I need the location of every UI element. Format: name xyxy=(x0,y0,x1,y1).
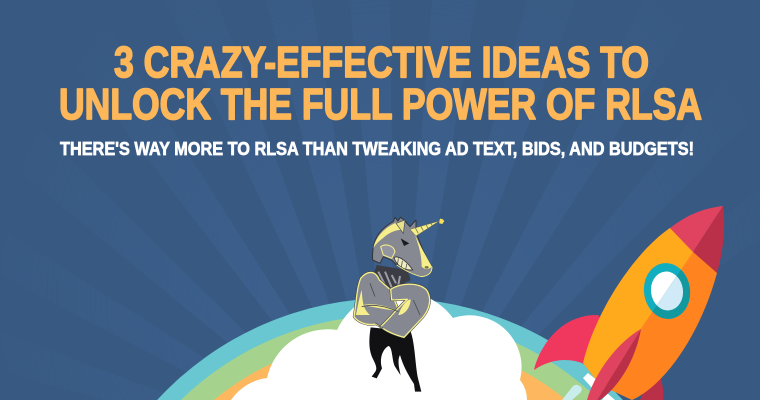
horn xyxy=(410,221,439,236)
arm highlights xyxy=(356,290,411,315)
head shape xyxy=(373,217,432,277)
eye xyxy=(401,238,409,246)
centre fin xyxy=(587,329,641,400)
title xyxy=(59,38,702,129)
background sunburst rays xyxy=(218,124,572,342)
rocket xyxy=(534,206,724,400)
cloud xyxy=(231,291,527,400)
nostril xyxy=(425,266,429,269)
mane highlight xyxy=(373,223,403,248)
body xyxy=(583,228,717,400)
neck xyxy=(373,265,411,291)
title: 3 CRAZY-EFFECTIVE IDEAS TO xyxy=(114,38,649,87)
unicorn body xyxy=(354,265,430,392)
right fin xyxy=(640,365,663,400)
ear xyxy=(396,220,405,233)
horn star xyxy=(439,219,444,224)
subtitle: THERE'S WAY MORE TO RLSA THAN TWEAKING AD TEXT, BIDS, AND BUDGETS! xyxy=(60,139,694,159)
exhaust flame xyxy=(562,385,582,400)
porthole xyxy=(644,263,690,319)
teeth xyxy=(394,257,413,270)
nose cone xyxy=(670,206,723,252)
back arm and shoulder xyxy=(354,272,398,328)
horn rings xyxy=(415,223,432,233)
mouth edge xyxy=(397,265,432,277)
neck strands xyxy=(378,272,400,288)
rainbow xyxy=(157,298,623,400)
front forearm xyxy=(381,284,430,337)
teeth lines xyxy=(397,258,407,270)
legs xyxy=(369,327,421,392)
arm lines xyxy=(362,283,420,328)
left fin xyxy=(534,315,610,370)
nozzle xyxy=(583,373,615,400)
snout highlight xyxy=(414,234,432,269)
cheek patch xyxy=(381,245,395,258)
unicorn head xyxy=(373,217,444,277)
unicorn mascot xyxy=(354,217,444,392)
